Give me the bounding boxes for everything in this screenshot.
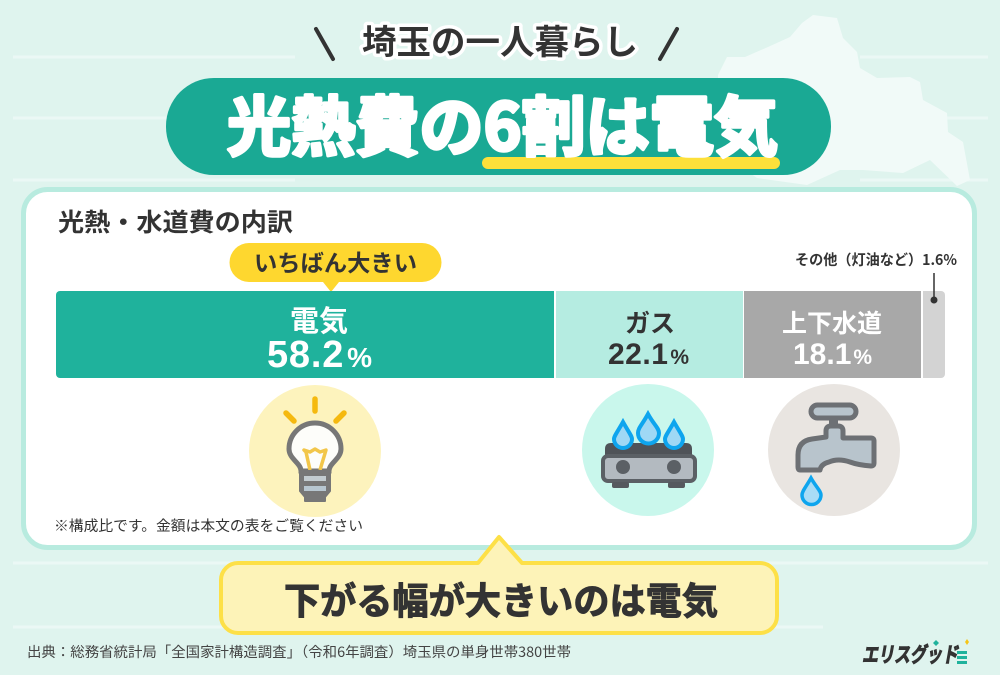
subtitle: [316, 15, 677, 64]
icon: light bulb: [249, 385, 381, 517]
segment: other: [923, 291, 945, 378]
water drop: [802, 478, 821, 504]
icon: water tap: [768, 384, 900, 516]
segment: gas: ガス: [625, 304, 675, 340]
label: other 1.6%: その他（灯油など）1.6%: [795, 249, 957, 270]
callout text: 下がる幅が大きいのは電気: [284, 571, 718, 625]
segment: electricity: 58.2%: [267, 334, 372, 376]
segment: gas: [556, 291, 743, 378]
badge: largest: [230, 243, 442, 292]
subtitle right slash: [660, 29, 677, 59]
segment: electricity: [56, 291, 554, 378]
gas flames: [614, 414, 683, 448]
icon: gas stove: [582, 384, 714, 516]
logo: エリスグッド: [861, 638, 962, 669]
source: 出典：総務省統計局「全国家計構造調査」（令和6年調査）埼玉県の単身世帯380世帯: [27, 642, 571, 662]
stacked bar chart: [56, 291, 945, 378]
title pill: [166, 75, 831, 175]
segment: water: 18.1%: [793, 338, 872, 371]
background: Saitama map silhouette: [718, 15, 970, 186]
panel heading: 光熱・水道費の内訳: [58, 203, 293, 239]
subtitle text: 埼玉の一人暮らし: [362, 15, 638, 64]
segment: water: [744, 291, 921, 378]
main panel: [24, 190, 974, 548]
segment: water: 上下水道: [782, 304, 882, 340]
badge: largest: いちばん大きい: [254, 244, 417, 278]
callout: [221, 537, 777, 633]
subtitle left slash: [316, 29, 333, 59]
note: ※構成比です。金額は本文の表をご覧ください: [54, 515, 363, 536]
segment: electricity: 電気: [290, 298, 348, 340]
title underline: [482, 157, 780, 169]
segment: gas: 22.1%: [608, 338, 689, 371]
title text: 光熱費の6割は電気: [227, 75, 778, 169]
label: other 1.6%: [795, 249, 957, 304]
